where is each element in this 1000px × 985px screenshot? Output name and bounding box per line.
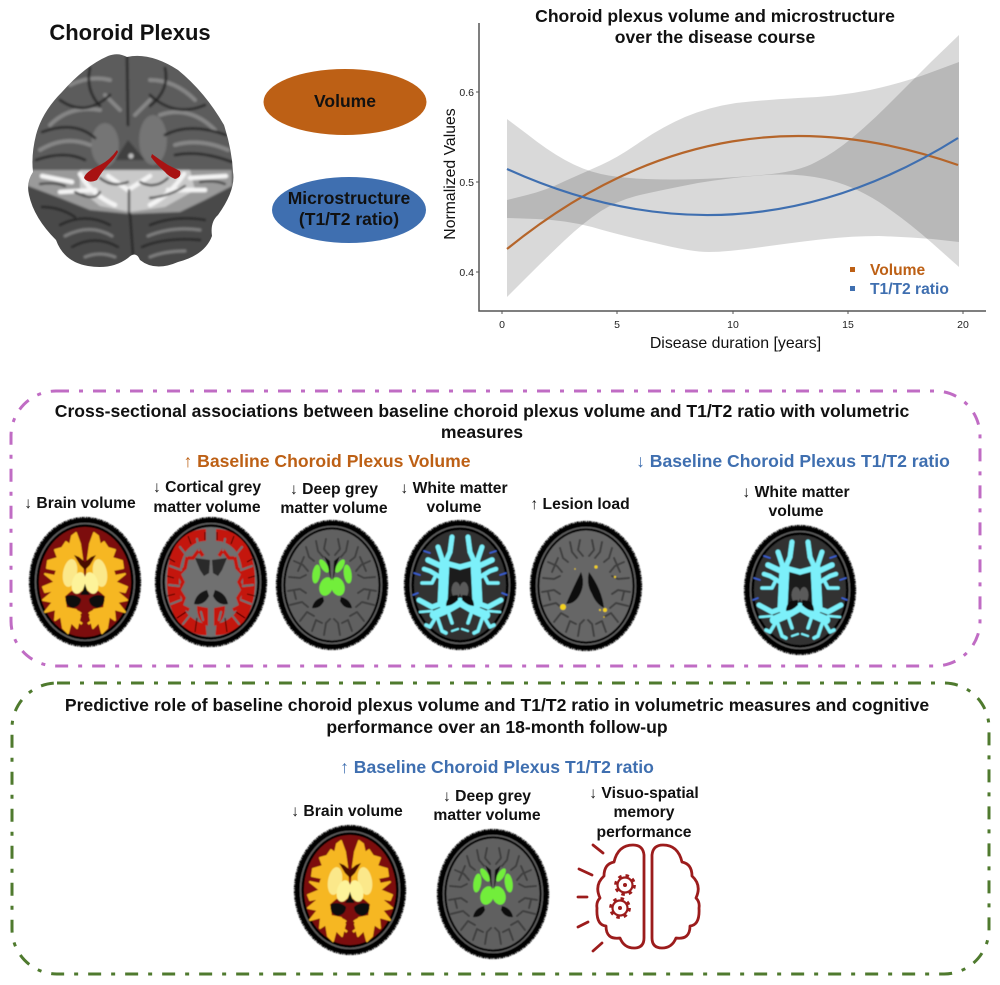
heading: predictive role: performance over an 18-month follow-up — [326, 717, 668, 737]
label: white matter volume, T1/T2 — [742, 484, 850, 520]
label: deep grey matter volume: ↓ Deep grey — [290, 481, 378, 498]
panel: predictive role over 18-month follow-up — [12, 683, 989, 974]
heading: predictive role: Predictive role of baseline choroid plexus volume and T1/T2 ratio in volumetric measures and cognitive — [65, 695, 929, 715]
icon: brain with gears — [578, 845, 699, 951]
axes — [476, 23, 986, 314]
badge: Volume: Volume — [314, 91, 376, 111]
line: T1/T2 ratio — [507, 138, 958, 215]
line: volume — [507, 136, 958, 249]
x-axis tick labels: 20 — [957, 319, 969, 331]
label: deep grey matter volume: ↓ Deep grey — [443, 788, 531, 805]
label: deep grey matter volume — [280, 481, 388, 517]
label: white matter volume — [400, 480, 508, 516]
panel: cross-sectional associations — [11, 391, 980, 666]
badge: Microstructure (T1/T2 ratio) — [272, 177, 426, 243]
y-axis tick labels: 0.4 — [459, 267, 474, 279]
label: lesion load: ↑ Lesion load — [530, 496, 630, 513]
confidence band: volume — [507, 62, 959, 297]
label: visuo-spatial memory performance — [589, 785, 699, 841]
x-axis tick labels: 5 — [614, 319, 620, 331]
subheading: baseline choroid plexus T1/T2 ratio: ↓ Baseline Choroid Plexus T1/T2 ratio — [636, 451, 950, 471]
y-axis tick labels — [459, 87, 474, 279]
heading: Choroid Plexus: Choroid Plexus — [49, 20, 211, 45]
brain scan: lesion load — [531, 522, 641, 650]
x-axis tick labels: 0 — [499, 319, 505, 331]
label: cortical grey matter volume — [153, 479, 261, 516]
y-axis tick labels: 0.6 — [459, 87, 474, 99]
x-axis tick labels: 10 — [727, 319, 739, 331]
label: cortical grey matter volume: ↓ Cortical grey — [153, 479, 261, 496]
y-axis tick labels: 0.5 — [459, 177, 474, 189]
x-axis tick labels — [499, 319, 969, 331]
label: white matter volume, T1/T2: volume — [769, 503, 824, 520]
label: visuo-spatial memory performance: performance — [596, 824, 692, 841]
label: white matter volume: volume — [427, 499, 482, 516]
heading: cross-sectional associations: Cross-sectional associations between baseline choroid plexus volume and T1/T2 ratio with volumetric — [55, 401, 909, 421]
badge: Microstructure (T1/T2 ratio): Microstructure — [288, 188, 411, 208]
icon: right choroid plexus in red — [151, 154, 180, 179]
label: cortical grey matter volume: matter volume — [153, 499, 261, 516]
label: deep grey matter volume — [433, 788, 541, 824]
label: brain volume: ↓ Brain volume — [291, 803, 403, 820]
brain scan: cortical grey matter — [156, 518, 266, 646]
heading: predictive role — [65, 695, 929, 737]
subheading: baseline choroid plexus volume: ↑ Baseline Choroid Plexus Volume — [183, 451, 471, 471]
legend: Volume — [870, 262, 925, 279]
label: deep grey matter volume: matter volume — [433, 807, 541, 824]
label: visuo-spatial memory performance: ↓ Visuo-spatial — [589, 785, 699, 802]
legend — [850, 262, 949, 298]
label: brain volume: ↓ Brain volume — [24, 495, 136, 512]
label: visuo-spatial memory performance: memory — [613, 804, 675, 821]
label: white matter volume, T1/T2: ↓ White matter — [742, 484, 850, 501]
brain scan: white matter — [405, 521, 515, 649]
x-axis tick labels: 15 — [842, 319, 854, 331]
chart title: Choroid plexus volume and microstructure — [535, 6, 895, 26]
brain scan: white matter, T1/T2 — [745, 526, 855, 654]
icon: left choroid plexus in red — [84, 150, 118, 182]
y-axis label: Normalized Values — [442, 108, 459, 240]
heading: cross-sectional associations: measures — [441, 422, 523, 442]
legend: T1/T2 ratio — [870, 281, 949, 298]
brain scan: deep grey matter — [277, 521, 387, 649]
badge: Microstructure (T1/T2 ratio): (T1/T2 ratio) — [299, 209, 399, 229]
subheading: baseline choroid plexus T1/T2 ratio: ↑ Baseline Choroid Plexus T1/T2 ratio — [340, 757, 654, 777]
brain scan: brain volume — [30, 518, 140, 646]
brain scan: brain volume — [295, 826, 405, 954]
chart title: over the disease course — [615, 27, 815, 47]
icon: coronal brain section — [28, 54, 234, 267]
badge: Volume — [264, 69, 426, 135]
confidence band: T1/T2 ratio — [507, 35, 959, 252]
chart title — [535, 6, 895, 47]
panel: choroid plexus anatomy — [28, 24, 234, 267]
x-axis label: Disease duration [years] — [650, 335, 821, 352]
heading: cross-sectional associations — [55, 401, 909, 442]
label: white matter volume: ↓ White matter — [400, 480, 508, 497]
label: deep grey matter volume: matter volume — [280, 500, 388, 517]
chart: volume and microstructure over disease course — [442, 6, 986, 352]
brain scan: deep grey matter — [438, 830, 548, 958]
